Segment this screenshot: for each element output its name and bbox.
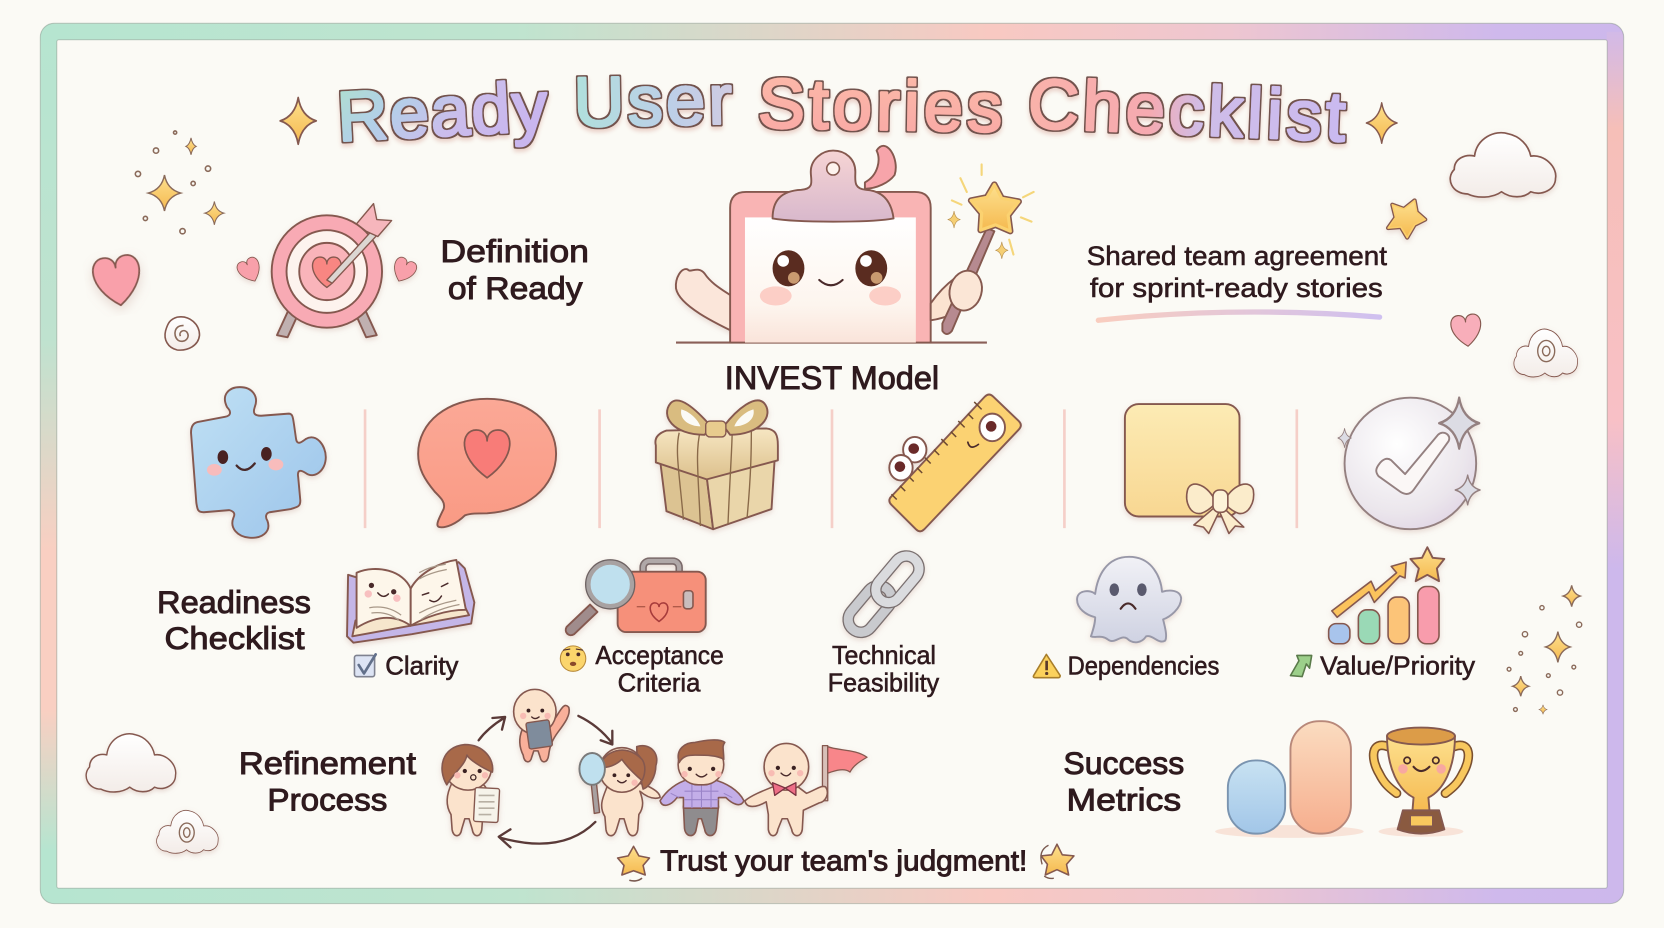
label: Acceptance Criteria: [560, 642, 724, 697]
dividers: [365, 409, 1297, 528]
icon: speech bubble with heart (Negotiable): [418, 399, 556, 527]
title: Stories: [757, 64, 1003, 147]
callout: Trust your team's judgment: [618, 844, 1074, 881]
icon: cloud top right: [1450, 133, 1556, 197]
icon: pearl check (Testable): [1338, 398, 1480, 529]
heading: Success Metrics: Success: [1063, 745, 1184, 781]
label: Value/Priority: Value/Priority: [1320, 653, 1475, 681]
icon: title sparkle right: [1366, 103, 1397, 143]
label: Clarity: Clarity: [385, 653, 459, 681]
title: [335, 60, 1347, 156]
icon: small swirl cloud right: [1514, 329, 1578, 377]
heading: Definition of Ready: Definition: [440, 233, 589, 269]
label: Clarity: [354, 653, 459, 681]
label: Technical Feasibility: Feasibility: [828, 669, 939, 697]
heading: Readiness Checklist: [157, 584, 311, 656]
checklist item: growth chart with star: [1329, 547, 1444, 644]
person: brown hair with document: [442, 745, 500, 836]
icon: ruler with eyes (Estimable): [889, 395, 1021, 531]
checklist item: open book: [347, 560, 474, 643]
title: Checklist: [1027, 64, 1347, 156]
label: Acceptance Criteria: Acceptance: [595, 642, 724, 670]
icon: gift box (Valuable): [655, 400, 778, 529]
heading: Refinement Process: Process: [267, 781, 387, 817]
title: User: [573, 60, 732, 141]
heading: Readiness Checklist: Readiness: [157, 584, 311, 620]
callout: Trust your team's judgment: Trust your team's judgment!: [660, 846, 1027, 878]
icon: small pink heart right: [1450, 313, 1483, 348]
icon: sticky note with bow (Small): [1125, 404, 1254, 533]
icon: smiling trophy: [1374, 728, 1468, 837]
heading: INVEST Model: INVEST Model: [725, 359, 939, 396]
checklist item: chain links: [843, 551, 924, 638]
person: man with plaid shirt: [660, 740, 744, 836]
decoration: sparkles right: [1507, 585, 1582, 714]
icon: cloud bottom left: [86, 734, 176, 792]
heading: Success Metrics: Metrics: [1067, 781, 1181, 817]
chart: success metric pills: [1215, 721, 1364, 838]
checklist item: magnifier and briefcase: [566, 560, 706, 635]
heading: Refinement Process: [239, 745, 416, 817]
text: shared team agreement: Shared team agreement: [1087, 241, 1388, 271]
person: ponytail with magnifier: [579, 746, 660, 836]
decoration: sparkles top left: [135, 131, 224, 234]
icon: gold star: [1388, 200, 1425, 238]
icon: big pink heart: [91, 253, 144, 308]
heading: Readiness Checklist: Checklist: [164, 620, 305, 656]
label: Technical Feasibility: [828, 642, 939, 697]
heading: Definition of Ready: of Ready: [448, 270, 583, 306]
icon: swirl cloud bottom left: [157, 810, 218, 853]
mascot: clipboard with magic wand: [676, 146, 1034, 343]
heading: Success Metrics: [1063, 745, 1184, 817]
icon: swirl cloud: [165, 317, 200, 350]
label: Acceptance Criteria: Criteria: [618, 669, 701, 697]
label: Technical Feasibility: Technical: [832, 642, 936, 670]
arrow: cycle arrows: [479, 716, 612, 847]
title: Ready: [335, 67, 549, 156]
text: shared team agreement: for sprint-ready stories: [1090, 273, 1383, 303]
heading: Definition of Ready: [440, 233, 589, 306]
icon: puzzle piece (Independent): [191, 387, 326, 538]
icon: target with arrow: [235, 204, 419, 337]
text: shared team agreement: [1087, 241, 1388, 320]
person: with flag and bow tie: [745, 743, 867, 836]
heading: Refinement Process: Refinement: [239, 745, 416, 781]
icon: title sparkle left: [280, 98, 316, 144]
label: Dependencies: Dependencies: [1068, 653, 1219, 681]
person: with notepad waving: [514, 689, 569, 762]
checklist item: sad ghost: [1077, 557, 1181, 642]
